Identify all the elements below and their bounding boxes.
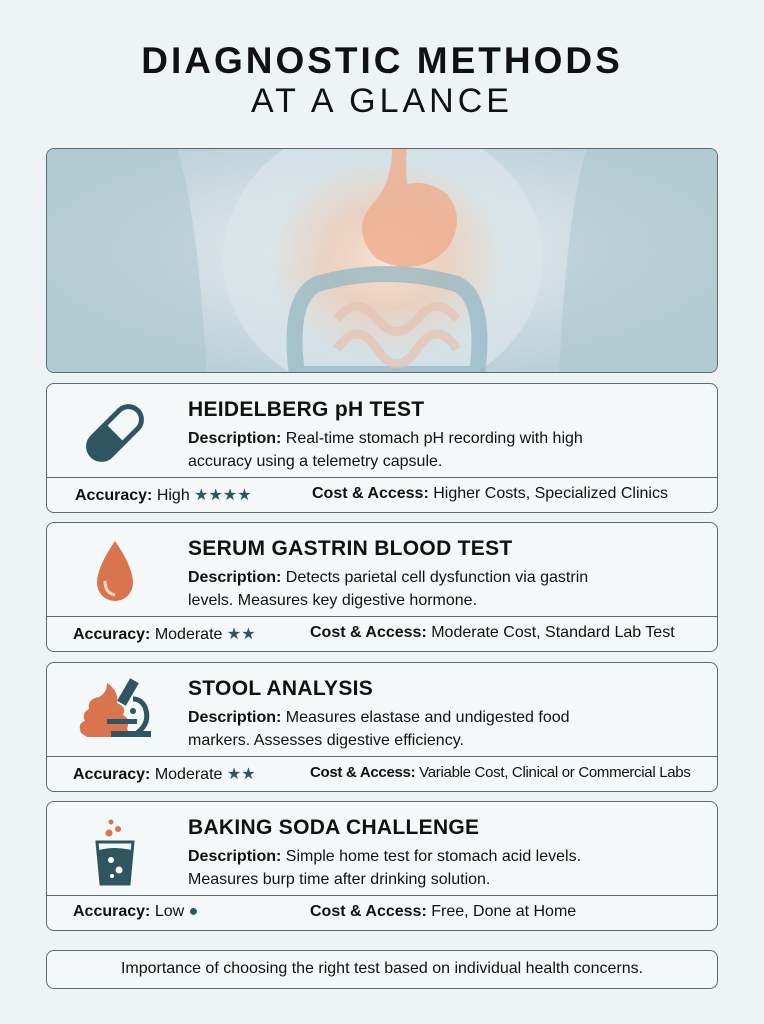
hero image: digestive system bbox=[46, 148, 718, 373]
footer: accuracy and cost: Cost & Access: Free, Done at Home bbox=[310, 903, 576, 920]
card: baking soda: BAKING SODA CHALLENGE bbox=[188, 816, 479, 839]
footer: accuracy and cost: Cost & Access: Higher Costs, Specialized Clinics bbox=[312, 485, 668, 502]
footer: accuracy and cost bbox=[73, 903, 576, 920]
card: Heidelberg pH test: Description: Real-time stomach pH recording with high bbox=[188, 430, 583, 447]
card: serum gastrin: Description: Detects parietal cell dysfunction via gastrin bbox=[188, 569, 588, 586]
footer note: Importance of choosing the right test based on individual health concerns. bbox=[121, 960, 643, 977]
footer note bbox=[46, 950, 718, 989]
card: Heidelberg pH test: accuracy using a telemetry capsule. bbox=[188, 453, 442, 470]
card: Heidelberg pH test bbox=[46, 383, 718, 513]
card: serum gastrin bbox=[46, 522, 718, 652]
icon: capsule bbox=[86, 404, 144, 462]
title bbox=[141, 40, 623, 120]
card: stool analysis bbox=[46, 662, 718, 792]
footer: accuracy and cost: Accuracy: Moderate ★★ bbox=[73, 626, 256, 643]
title: DIAGNOSTIC METHODS bbox=[141, 40, 623, 81]
card: stool analysis: markers. Assesses digestive efficiency. bbox=[188, 732, 464, 749]
card: baking soda: Measures burp time after drinking solution. bbox=[188, 871, 490, 888]
footer: accuracy and cost: Accuracy: Low ● bbox=[73, 903, 198, 920]
card: serum gastrin: SERUM GASTRIN BLOOD TEST bbox=[188, 537, 513, 560]
title: AT A GLANCE bbox=[251, 82, 513, 120]
card: baking soda: Description: Simple home test for stomach acid levels. bbox=[188, 848, 581, 865]
footer: accuracy and cost: Accuracy: Moderate ★★ bbox=[73, 766, 256, 783]
footer: accuracy and cost bbox=[75, 485, 668, 504]
card: serum gastrin: levels. Measures key digestive hormone. bbox=[188, 592, 477, 609]
card: stool analysis: STOOL ANALYSIS bbox=[188, 677, 373, 700]
icon: blood drop bbox=[97, 541, 133, 601]
footer: accuracy and cost: Cost & Access: Moderate Cost, Standard Lab Test bbox=[310, 624, 675, 641]
footer: accuracy and cost: Cost & Access: Variable Cost, Clinical or Commercial Labs bbox=[310, 764, 691, 781]
icon: glass with bubbles bbox=[95, 820, 135, 886]
card: Heidelberg pH test: HEIDELBERG pH TEST bbox=[188, 398, 424, 421]
card: stool analysis: Description: Measures elastase and undigested food bbox=[188, 709, 570, 726]
footer: accuracy and cost bbox=[73, 764, 691, 783]
card: baking soda bbox=[46, 801, 718, 931]
icon: stool and microscope bbox=[80, 678, 151, 737]
footer: accuracy and cost: Accuracy: High ★★★★ bbox=[75, 487, 252, 504]
footer: accuracy and cost bbox=[73, 624, 675, 643]
